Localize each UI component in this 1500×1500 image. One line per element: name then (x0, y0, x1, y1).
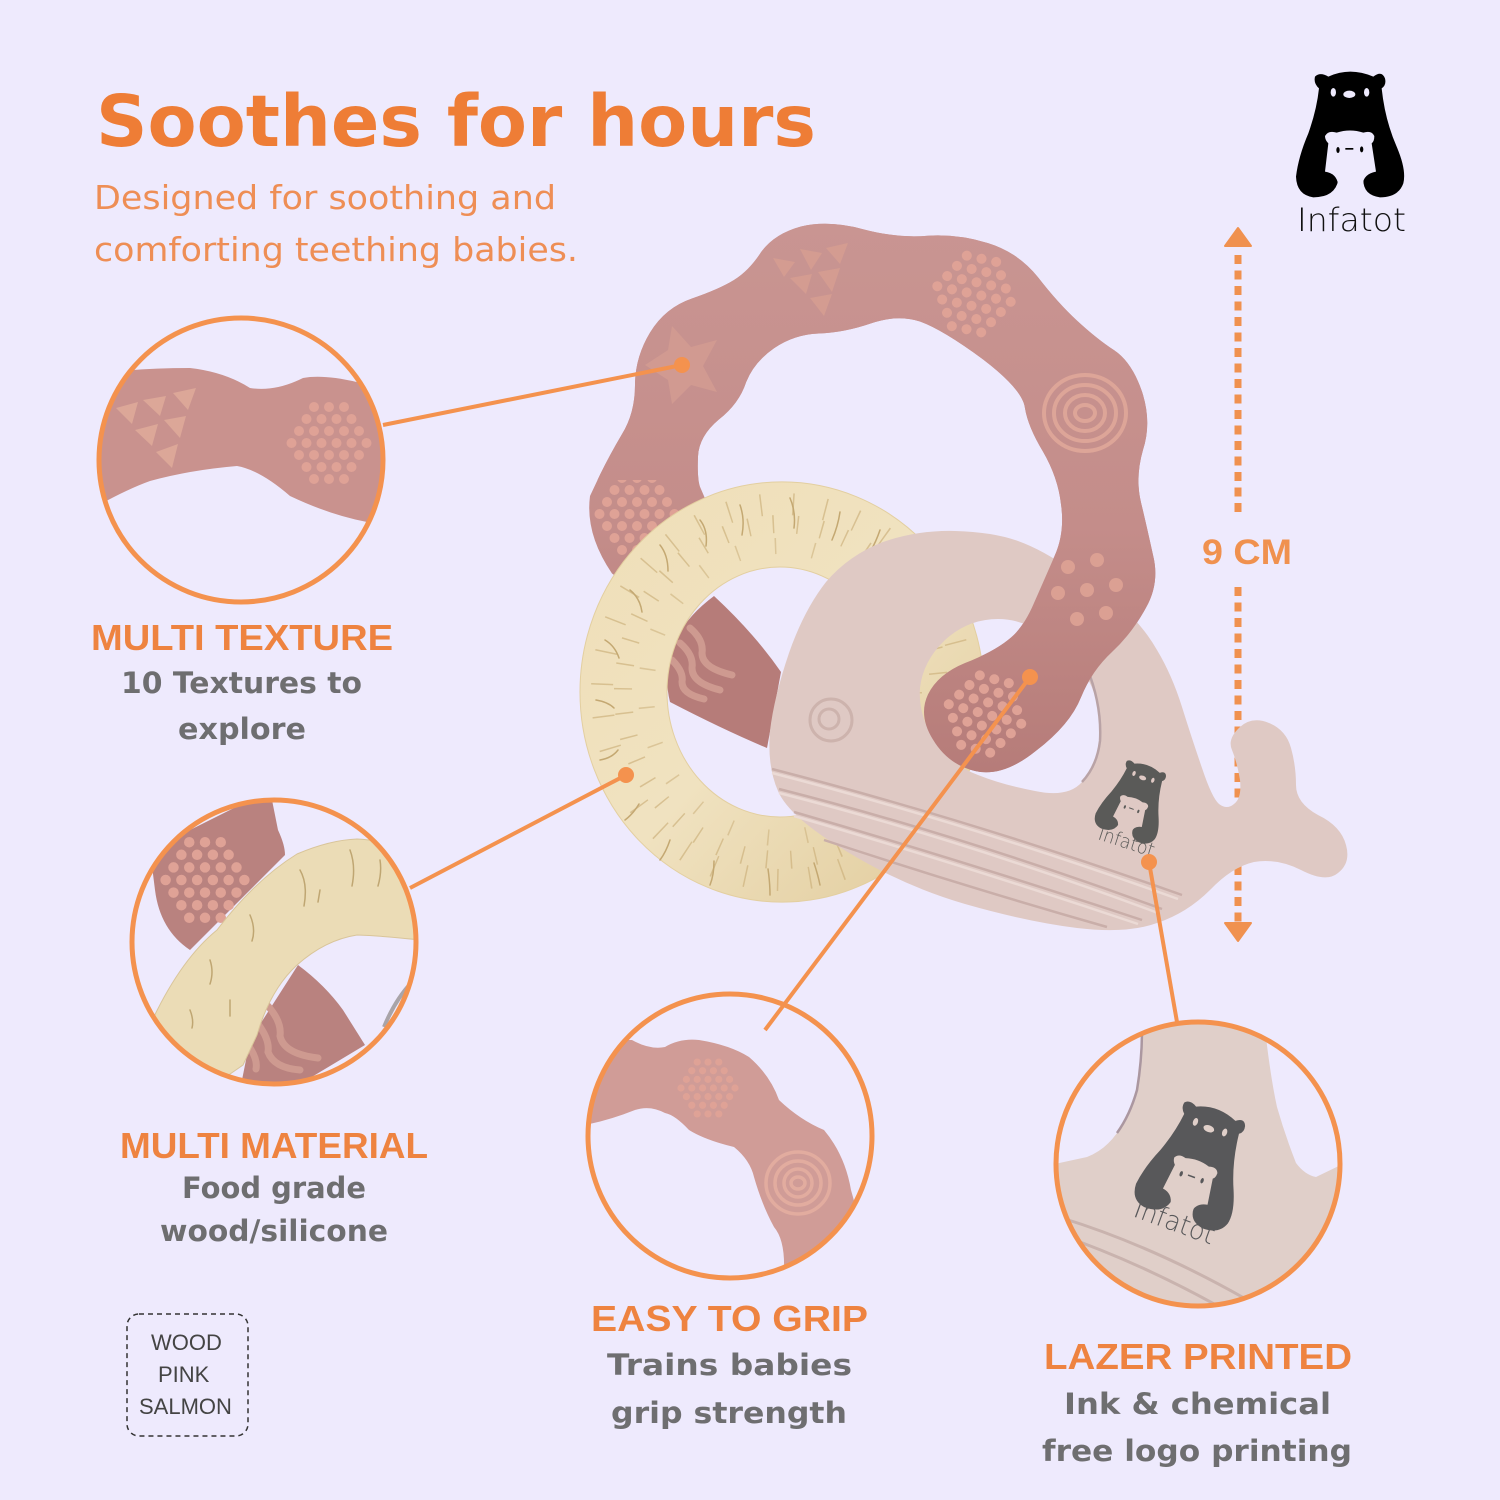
label: multi material: MULTI MATERIAL (120, 1125, 428, 1166)
colour options box: PINK (158, 1362, 210, 1387)
panel: multi texture detail circle (90, 318, 400, 602)
silicone ring, rear portion (589, 224, 1155, 772)
panel: easy to grip detail circle (585, 994, 872, 1278)
dimension arrow: 9 CM: 9 CM (1202, 533, 1292, 572)
texture: spiral (1044, 375, 1126, 451)
colour options box: SALMON (139, 1394, 232, 1419)
panel: multi material detail circle (132, 790, 420, 1090)
label: easy to grip: Trains babies (607, 1348, 852, 1382)
label: multi texture: 10 Textures to (121, 666, 362, 700)
title: Soothes for hours (96, 80, 816, 163)
texture: lower dots (939, 670, 1031, 759)
subtitle (94, 178, 578, 269)
whale (769, 531, 1347, 930)
colour options box (127, 1314, 248, 1436)
texture: triangles (773, 243, 848, 316)
texture: dots (930, 251, 1019, 337)
label: easy to grip: EASY TO GRIP (591, 1298, 868, 1339)
brand logo: Infatot bear (1296, 72, 1406, 239)
label: multi texture: explore (178, 712, 306, 746)
wooden ring (580, 482, 984, 902)
silicone ring, front portion (589, 224, 1155, 772)
texture: bumps (1051, 553, 1123, 626)
label: easy to grip: grip strength (611, 1396, 847, 1430)
whale logo print: Infatot (1095, 823, 1157, 862)
callout connector lines (383, 357, 1177, 1030)
label: easy to grip (591, 1298, 868, 1430)
label: multi texture: MULTI TEXTURE (91, 617, 393, 658)
subtitle: Designed for soothing and (94, 178, 556, 217)
label: multi texture (91, 617, 393, 746)
texture: star (645, 326, 717, 404)
panel: lazer printed detail circle: Infatot (1130, 1193, 1219, 1251)
label: multi material: Food grade (182, 1171, 366, 1205)
label: multi material (120, 1125, 428, 1248)
product: teether (580, 224, 1347, 930)
whale logo print (1091, 754, 1178, 862)
colour options box: WOOD (151, 1330, 222, 1355)
dimension arrow: 9 CM (1202, 228, 1292, 941)
label: lazer printed (1042, 1336, 1352, 1468)
panel: lazer printed detail circle (1050, 1020, 1345, 1320)
label: multi material: wood/silicone (160, 1214, 388, 1248)
brand logo: Infatot bear: Infatot (1297, 201, 1406, 239)
label: lazer printed: Ink & chemical (1064, 1387, 1331, 1421)
subtitle: comforting teething babies. (94, 230, 578, 269)
label: lazer printed: LAZER PRINTED (1044, 1336, 1352, 1377)
label: lazer printed: free logo printing (1042, 1434, 1352, 1468)
